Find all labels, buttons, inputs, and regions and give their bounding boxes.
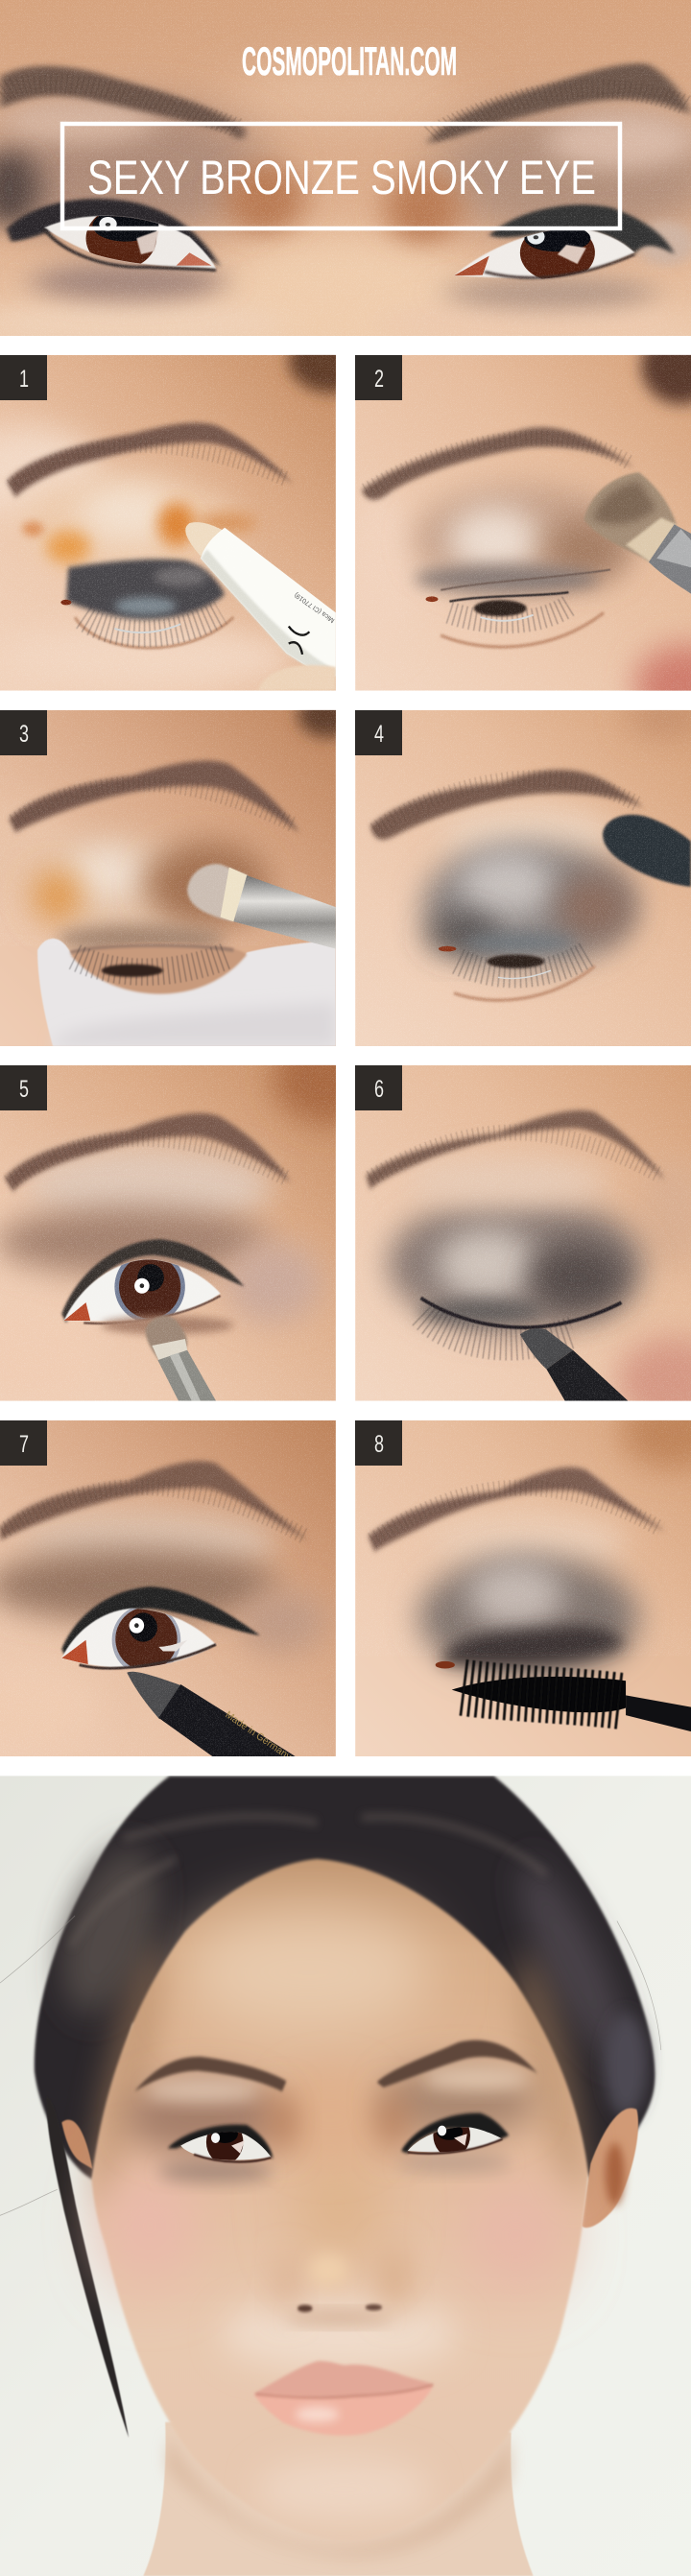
panel: step 5 photo [0,1065,336,1401]
badge 4 [355,710,402,755]
logo: cosmopolitan.com: COSMOPOLITAN.COM [242,39,457,84]
skin sparkle grain [0,0,691,336]
mascara wand [452,1677,691,1731]
blush brush [584,472,691,594]
panel: step 3 photo [0,710,336,1046]
eye pencil with imprint: Made in Germany [224,1709,294,1763]
crayon pencil: Mica (CI 77019) [294,591,336,624]
steps 1-4 photo grid [0,327,691,1046]
badge 1 [0,355,47,400]
panel: step 1 photo [0,355,336,691]
right eye [489,204,675,254]
crayon pencil [185,522,336,677]
badge 3 [0,710,47,755]
hair [35,1776,655,2180]
right eye [401,2113,509,2157]
badge 5: 5 [19,1075,29,1103]
concealer brush [187,864,336,949]
badge 2: 2 [374,365,384,393]
badge 8 [355,1420,402,1466]
eye with liner [61,1586,260,1676]
black eye shadow brush [603,815,691,887]
ears [582,2109,638,2228]
panel: step 2 photo [355,355,691,691]
face [92,1859,588,2540]
badge 3: 3 [19,720,29,748]
eye shield [37,939,336,1046]
left eye [167,2120,274,2163]
badge 7: 7 [19,1430,29,1458]
eye pencil [520,1328,628,1401]
badge 6 [355,1065,402,1110]
eyebrows [134,2057,286,2091]
eye shadow [124,2079,282,2156]
panel: step 7 photo [0,1420,336,1763]
small brush [146,1316,216,1401]
badge 4: 4 [374,720,384,748]
badge 2 [355,355,402,400]
badge 5 [0,1065,47,1110]
panel: step 4 photo [355,699,691,1046]
badge 8: 8 [374,1430,384,1458]
open eye [61,1239,245,1324]
badge 7 [0,1420,47,1466]
lips [253,2361,434,2436]
step number badges [0,355,402,1466]
panel: step 6 photo [355,1065,691,1427]
badge 6: 6 [374,1075,384,1103]
loose hair strand [46,2097,129,2438]
eye shadow shapes [0,99,265,240]
steps 5-8 photo grid [0,1033,691,1763]
nose [274,2249,410,2324]
fingertip [258,665,336,691]
final look portrait photo [0,1776,691,2576]
panel: step 8 photo [355,1395,691,1756]
eyebrows [0,66,245,139]
stray hairs [0,1916,661,2215]
neck [143,2422,534,2576]
header photo: close-up of eyes [0,0,691,362]
badge 1: 1 [19,365,29,393]
title box [62,124,620,228]
eye pencil with imprint [127,1672,296,1763]
left eye [7,199,221,267]
